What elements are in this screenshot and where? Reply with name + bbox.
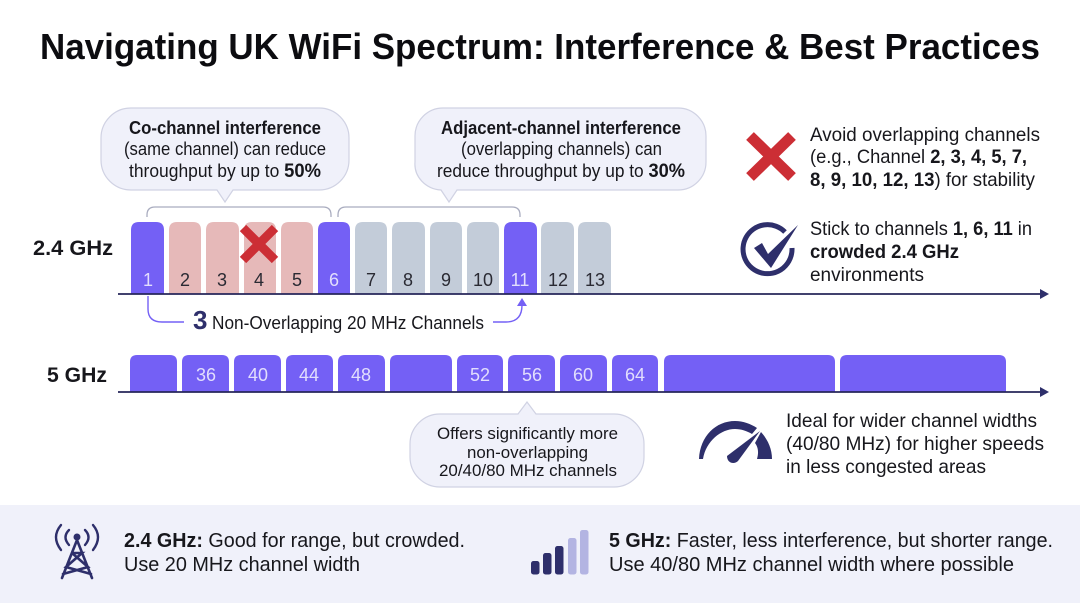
channel 11 (504, 222, 537, 294)
callout: 5 GHz non-overlapping channels: Offers significantly more (437, 424, 618, 443)
channel 48 (338, 355, 385, 392)
channel 60: 60 (573, 365, 593, 385)
channel 2 (169, 222, 201, 294)
advice: wider channel widths: in less congested areas (786, 456, 986, 478)
channel 2: 2 (180, 270, 190, 290)
connector: non-overlapping channels (148, 296, 527, 322)
advice: stick to channels 1, 6, 11: Stick to channels 1, 6, 11 in (810, 218, 1032, 240)
icon: speedometer gauge (699, 421, 772, 463)
advice: wider channel widths (699, 410, 1044, 478)
icon: red cross (750, 136, 792, 177)
channel 60 (560, 355, 607, 392)
callout: co-channel interference: (same channel) can reduce (124, 139, 326, 159)
channel 9 (430, 222, 462, 294)
callout: co-channel interference: Co-channel interference (129, 118, 321, 138)
channel 1 (131, 222, 164, 294)
advice: stick to channels 1, 6, 11 (743, 218, 1032, 286)
text: non-overlapping channels: 3 (193, 305, 207, 335)
channel 40 (234, 355, 281, 392)
channel 13: 13 (585, 270, 605, 290)
channel 64 (612, 355, 658, 392)
channel 10 (467, 222, 499, 294)
channel 3 (206, 222, 239, 294)
callout: 5 GHz non-overlapping channels: non-overlapping (467, 443, 588, 462)
channel 64: 64 (625, 365, 645, 385)
channel 8 (392, 222, 425, 294)
channel 5 (281, 222, 313, 294)
wide block (840, 355, 1006, 392)
channel 13 (578, 222, 611, 294)
text: 5 GHz summary: Use 40/80 MHz channel width where possible (609, 554, 1014, 576)
text: non-overlapping channels: Non-Overlapping 20 MHz Channels (212, 313, 484, 333)
icon: red cross on channel 4 (243, 228, 275, 260)
text: 2.4 GHz summary: Use 20 MHz channel width (124, 554, 360, 576)
chart: 2.4 GHz channels (131, 222, 611, 294)
channel 52: 52 (470, 365, 490, 385)
icon: check circle (743, 225, 798, 274)
advice: stick to channels 1, 6, 11: crowded 2.4 GHz (810, 241, 959, 263)
advice: stick to channels 1, 6, 11: environments (810, 264, 924, 286)
channel 5: 5 (292, 270, 302, 290)
channel 3: 3 (217, 270, 227, 290)
channel 9: 9 (441, 270, 451, 290)
channel 48: 48 (351, 365, 371, 385)
channel 56: 56 (522, 365, 542, 385)
advice: wider channel widths: (40/80 MHz) for higher speeds (786, 433, 1044, 455)
channel 52 (457, 355, 503, 392)
channel 1: 1 (143, 270, 153, 290)
callout: adjacent-channel interference: reduce throughput by up to 30% (437, 161, 685, 182)
channel 6: 6 (329, 270, 339, 290)
icon: signal bars (531, 530, 588, 574)
label: 5 GHz: 5 GHz (47, 363, 107, 387)
wide block (130, 355, 177, 392)
text: 2.4 GHz summary: 2.4 GHz: Good for range, but crowded. (124, 530, 465, 552)
wide block (664, 355, 835, 392)
channel 44 (286, 355, 333, 392)
channel 7: 7 (366, 270, 376, 290)
callout: 5 GHz non-overlapping channels (410, 402, 644, 487)
label: 2.4 GHz: 2.4 GHz (33, 236, 113, 260)
panel: summary band (0, 505, 1080, 603)
icon: radio tower (56, 525, 98, 578)
arrowhead: 5 GHz axis (1040, 387, 1049, 397)
text: 2.4 GHz summary (124, 530, 465, 576)
channel 7 (355, 222, 387, 294)
channel 56 (508, 355, 555, 392)
advice: avoid overlapping channels (750, 124, 1040, 191)
advice: avoid overlapping channels: (e.g., Channel 2, 3, 4, 5, 7, (810, 146, 1027, 168)
callout: adjacent-channel interference: Adjacent-channel interference (441, 118, 681, 138)
advice: avoid overlapping channels: Avoid overlapping channels (810, 124, 1040, 146)
text: 5 GHz summary (609, 530, 1053, 576)
axis: 2.4 GHz (118, 293, 1041, 295)
channel 11: 11 (511, 270, 529, 290)
text: 5 GHz summary: 5 GHz: Faster, less interference, but shorter range. (609, 530, 1053, 552)
channel 36 (182, 355, 229, 392)
title: Navigating UK WiFi Spectrum: Interference & Best Practices (40, 26, 1040, 67)
axis: 5 GHz (118, 391, 1041, 393)
advice: wider channel widths: Ideal for wider channel widths (786, 410, 1037, 432)
channel 44: 44 (299, 365, 319, 385)
callout: 5 GHz non-overlapping channels: 20/40/80 MHz channels (439, 461, 617, 480)
advice: avoid overlapping channels: 8, 9, 10, 12, 13) for stability (810, 169, 1035, 191)
channel 4 (244, 222, 276, 294)
callout: co-channel interference: throughput by up to 50% (129, 161, 321, 182)
callout: adjacent-channel interference: (overlapping channels) can (461, 139, 662, 159)
channel 10: 10 (473, 270, 493, 290)
bracket: adjacent-channel span (338, 207, 520, 217)
channel 12 (541, 222, 574, 294)
channel 40: 40 (248, 365, 268, 385)
callout: co-channel interference (101, 108, 349, 202)
channel 6 (318, 222, 350, 294)
callout: adjacent-channel interference (415, 108, 706, 202)
chart: 5 GHz channels (130, 355, 1006, 392)
bracket: co-channel span (147, 207, 331, 217)
channel 8: 8 (403, 270, 413, 290)
arrowhead: 2.4 GHz axis (1040, 289, 1049, 299)
channel 12: 12 (548, 270, 568, 290)
wide block (390, 355, 452, 392)
channel 4: 4 (254, 270, 264, 290)
channel 36: 36 (196, 365, 216, 385)
